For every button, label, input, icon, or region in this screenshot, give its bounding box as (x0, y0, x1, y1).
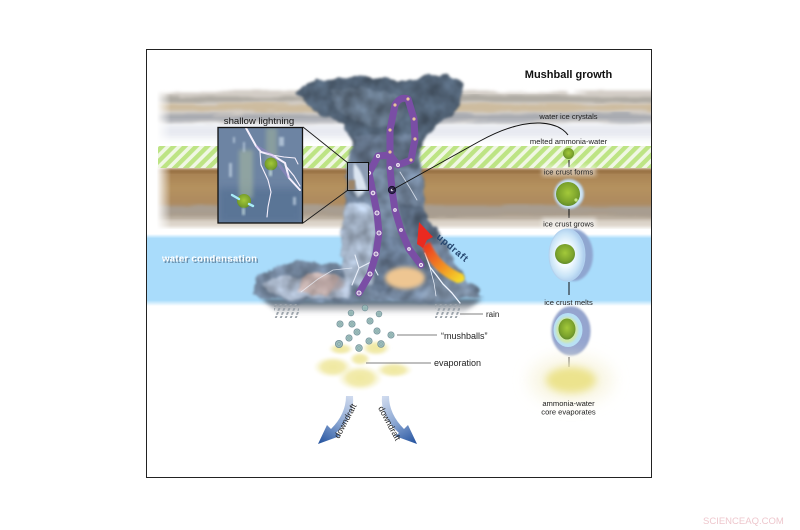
arrow: downdraft left (318, 396, 359, 444)
label: water ice crystals: water ice crystals (538, 112, 598, 121)
mushballs (335, 305, 394, 352)
label: rain: rain (486, 310, 499, 319)
arrow: updraft (417, 222, 471, 283)
label: ammonia-water core evaporates: core evaporates (541, 408, 596, 416)
label: shallow lightning: shallow lightning (224, 116, 294, 127)
watermark: SCIENCEAQ.COM (703, 516, 784, 527)
label: ice crust melts: ice crust melts (544, 298, 593, 307)
inset panel (218, 127, 303, 223)
label: rain (460, 310, 499, 319)
column and shelf (254, 150, 482, 302)
label: mushballs (397, 331, 488, 341)
label: water condensation: water condensation (161, 254, 257, 264)
arrow: downdraft right (376, 396, 417, 444)
layer: upper cloud band (150, 92, 660, 138)
stage: melted droplet (563, 148, 574, 167)
stage: ice crust forms (554, 180, 584, 218)
label: ice crust grows: ice crust grows (543, 220, 594, 228)
callout: shallow lightning (218, 116, 368, 223)
lightning in cloud (301, 172, 460, 303)
label: ice crust forms: ice crust forms (544, 168, 593, 176)
label: water condensation: water condensation (162, 255, 259, 266)
warm glow (385, 267, 425, 289)
stage: ice crust melts (552, 307, 590, 367)
layer: water condensation band (147, 234, 651, 306)
fade left (147, 85, 171, 233)
label: melted ammonia-water: melted ammonia-water (530, 137, 608, 146)
arrow: updraft: updraft (434, 232, 471, 265)
inset mushball lower (237, 194, 251, 208)
label: mushballs: “mushballs” (441, 331, 488, 341)
heading: Mushball growth: Mushball growth (525, 69, 612, 81)
source box (348, 162, 368, 190)
rain patches (274, 304, 460, 318)
purple mushball trajectory (357, 97, 423, 295)
trajectory markers (357, 154, 423, 295)
leader: trajectory to mushball growth (388, 123, 568, 194)
layer: green hatched band (158, 146, 651, 168)
layer: brown cloud band (150, 168, 662, 227)
lightning bolt (246, 128, 300, 217)
panel: atmospheric layers (147, 85, 662, 306)
label: evaporation: evaporation (434, 358, 481, 368)
arrow: downdraft right: downdraft (376, 404, 403, 443)
evaporation clouds (313, 340, 413, 391)
zoom lines (303, 127, 348, 223)
storm cloud (254, 74, 482, 314)
panel: growth sequence (529, 112, 613, 416)
stage: ammonia-water core evaporates (529, 356, 613, 404)
arrow: downdraft left: downdraft (332, 401, 359, 440)
stage: ice crust grows (549, 229, 593, 295)
inset mushball upper (265, 158, 277, 170)
label: evaporation (366, 358, 481, 368)
anvil (295, 74, 463, 168)
label: ammonia-water core evaporates: ammonia-water (542, 399, 595, 408)
panel: background frame (146, 50, 652, 478)
shadow under cloud (262, 299, 482, 314)
